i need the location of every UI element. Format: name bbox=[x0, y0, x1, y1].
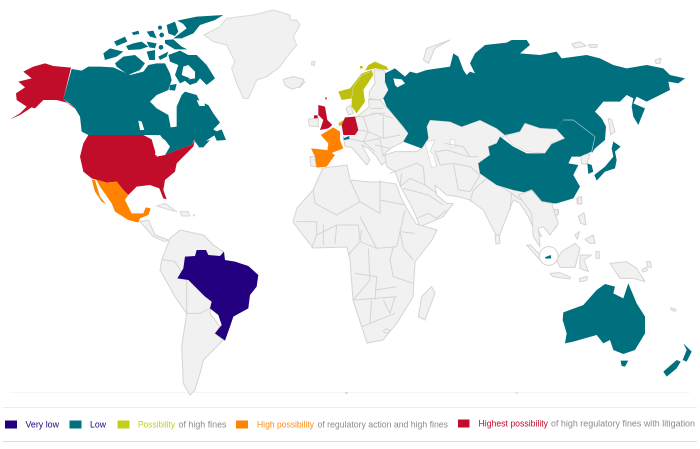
legend item: Possibility of high fines: of high fines bbox=[178, 420, 227, 430]
New Zealand bbox=[663, 343, 692, 377]
Canadian Arctic islands bbox=[103, 15, 223, 85]
European borders bbox=[347, 108, 400, 157]
legend bbox=[3, 408, 697, 442]
Switzerland bbox=[343, 136, 349, 140]
map: North America bbox=[10, 10, 305, 223]
Japan bbox=[594, 142, 621, 181]
Greenland bbox=[204, 10, 300, 98]
Caspian Sea and Aral Sea bbox=[425, 139, 456, 167]
Norway, Sweden and northern band bbox=[338, 62, 388, 126]
legend item: Low bbox=[70, 420, 106, 430]
legend item: Very low bbox=[5, 420, 59, 430]
South America grey bbox=[160, 230, 223, 395]
South Korea bbox=[587, 163, 593, 174]
map: Africa and South America bbox=[140, 220, 435, 395]
Southeast Asia grey bbox=[495, 190, 676, 311]
China bbox=[478, 120, 595, 206]
legend item: High possibility of regulatory action and high fines bbox=[236, 420, 448, 430]
Iceland bbox=[285, 78, 305, 87]
Singapore inset circle bbox=[539, 247, 558, 265]
Middle East and Asian borders bbox=[390, 143, 537, 230]
Canada bbox=[63, 15, 226, 155]
South America borders bbox=[162, 259, 210, 313]
legend item: Low: Low bbox=[90, 420, 106, 430]
United States and Alaska bbox=[10, 63, 195, 199]
Africa bbox=[293, 165, 437, 343]
Madagascar bbox=[418, 287, 435, 320]
legend item: High possibility of regulatory action and high fines: of regulatory action and high fines bbox=[318, 420, 448, 430]
Central America grey bbox=[140, 220, 168, 242]
Germany bbox=[342, 117, 358, 135]
legend item: Possibility of high fines: Possibility bbox=[138, 420, 175, 430]
legend item: Highest possibility of high regulatory fines with litigation: of high regulatory fines with litigation bbox=[551, 418, 695, 428]
map: Europe and Asia bbox=[283, 40, 685, 238]
Brazil bbox=[177, 250, 258, 341]
Russia and China border bbox=[563, 120, 595, 152]
France bbox=[321, 127, 343, 155]
Spain bbox=[311, 148, 335, 168]
map: Southeast Asia and Oceania bbox=[495, 190, 692, 377]
United Kingdom bbox=[314, 97, 332, 130]
grey Europe, Middle East, Central and South Asia bbox=[283, 40, 661, 238]
legend item: Highest possibility of high regulatory fines with litigation bbox=[458, 418, 695, 428]
Caribbean islands bbox=[157, 203, 195, 216]
legend item: Very low: Very low bbox=[26, 420, 59, 430]
legend item: High possibility of regulatory action and high fines: High possibility bbox=[257, 420, 314, 430]
African borders bbox=[297, 180, 415, 333]
Mexico bbox=[92, 179, 151, 223]
legend item: Possibility of high fines bbox=[118, 420, 227, 430]
Mongolia bbox=[505, 123, 565, 153]
legend item: Highest possibility of high regulatory fines with litigation: Highest possibility bbox=[478, 418, 548, 428]
Australia bbox=[563, 283, 645, 354]
Tasmania bbox=[621, 361, 628, 367]
Great Lakes bbox=[150, 135, 168, 155]
Russia bbox=[383, 40, 685, 153]
